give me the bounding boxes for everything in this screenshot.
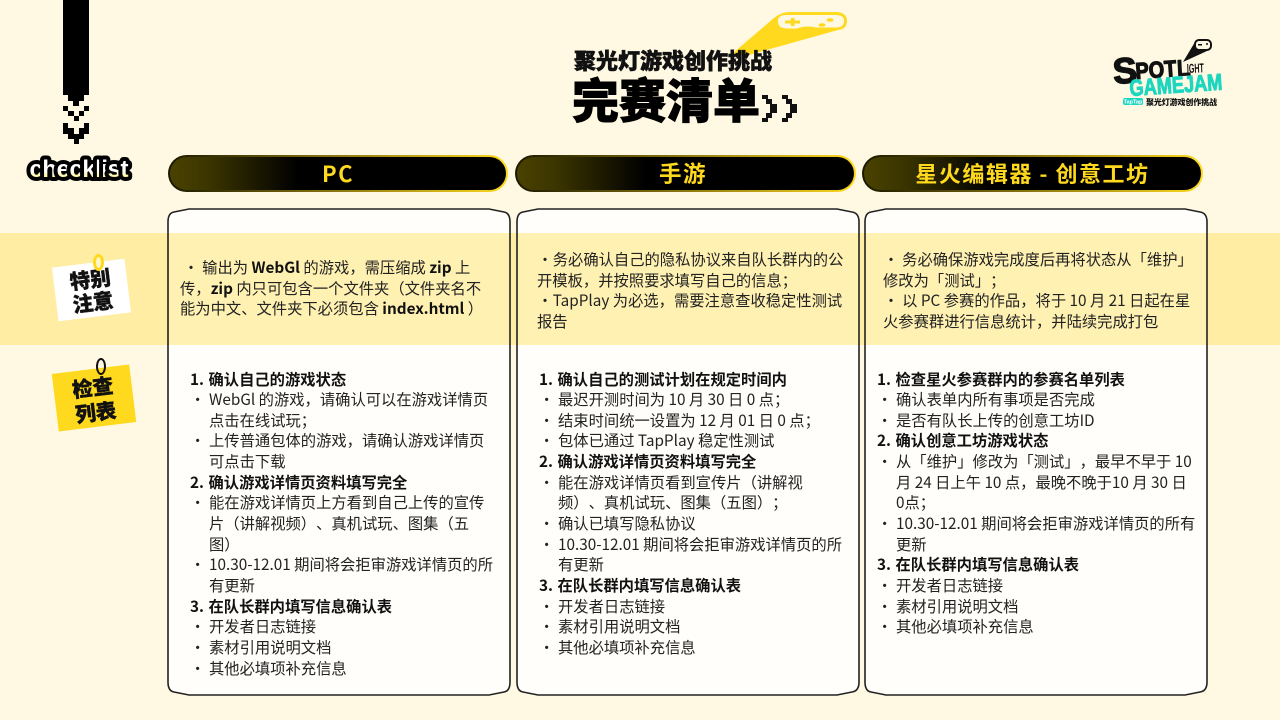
mobile special notes: 报告 — [537, 310, 568, 332]
logo TapTap badge: TapTap — [1124, 100, 1143, 106]
mobile checklist: 最迟开测时间为 10 月 30 日 0 点； — [558, 388, 789, 410]
Spark special notes: 火参赛群进行信息统计，并陆续完成打包 — [883, 310, 1158, 332]
PC checklist: 可点击下载 — [209, 450, 286, 472]
mobile checklist — [539, 368, 842, 658]
mobile special notes: ・TapPlay 为必选，需要注意查收稳定性测试 — [537, 289, 842, 311]
mobile checklist: ・ — [539, 636, 554, 658]
logo wordmark — [1111, 49, 1223, 101]
PC checklist: 有更新 — [209, 574, 255, 596]
mobile checklist: 2. 确认游戏详情页资料填写完全 — [539, 450, 756, 472]
PC special notes: 传，zip 内只可包含一个文件夹（文件夹名不 — [180, 277, 481, 299]
PC special notes: ・ 输出为 WebGl 的游戏，需压缩成 zip 上 — [183, 256, 470, 278]
mobile checklist: 3. 在队长群内填写信息确认表 — [539, 574, 741, 596]
logo spotlight cone and controller — [1183, 40, 1211, 62]
sticky note: special notes — [52, 259, 131, 321]
mobile checklist: 结束时间统一设置为 12 月 01 日 0 点； — [558, 409, 820, 431]
mobile checklist: ・ — [539, 471, 554, 493]
PC checklist: ・ — [190, 657, 205, 679]
mobile checklist: ・ — [539, 595, 554, 617]
Spark checklist: ・ — [877, 450, 892, 472]
logo wordmark: L — [1176, 54, 1191, 81]
Spark checklist: 更新 — [896, 533, 927, 555]
mobile checklist: 1. 确认自己的测试计划在规定时间内 — [539, 368, 787, 390]
icon: pixel drop pointer — [63, 0, 89, 144]
logo wordmark: IGHT — [1187, 60, 1204, 76]
icon: yellow paper clip — [93, 254, 104, 271]
mobile special notes — [537, 248, 843, 332]
PC checklist: ・ — [190, 429, 205, 451]
Spark special notes — [883, 248, 1193, 332]
Spark checklist: 是否有队长上传的创意工坊ID — [896, 409, 1095, 431]
PC checklist: ・ — [190, 615, 205, 637]
header pill: PC — [168, 155, 508, 192]
checklist label: checklist — [30, 156, 128, 183]
PC checklist: 能在游戏详情页上方看到自己上传的宣传 — [209, 491, 484, 513]
mobile checklist: 素材引用说明文档 — [558, 615, 680, 637]
PC special notes — [180, 256, 483, 319]
PC checklist: ・ — [190, 553, 205, 575]
icon: black paper clip — [96, 358, 106, 375]
sticky note: checklist — [52, 364, 136, 432]
logo wordmark: POT — [1135, 55, 1177, 84]
PC checklist: 其他必填项补充信息 — [209, 657, 347, 679]
PC special notes: 能为中文、文件夹下必须包含 index.html ） — [180, 297, 483, 319]
subtitle: 聚光灯游戏创作挑战 — [574, 44, 772, 76]
Spark checklist: ・ — [877, 574, 892, 596]
logo wordmark: S — [1111, 49, 1139, 92]
mobile checklist: 确认已填写隐私协议 — [558, 512, 696, 534]
header pill: Spark editor — [862, 155, 1203, 192]
Spark checklist: ・ — [877, 615, 892, 637]
PC checklist: 图） — [209, 533, 240, 555]
Spark checklist: ・ — [877, 388, 892, 410]
PC checklist: 开发者日志链接 — [209, 615, 316, 637]
header pill: mobile games — [515, 155, 856, 192]
mobile checklist: ・ — [539, 388, 554, 410]
header pill: PC: PC — [322, 157, 354, 189]
Spark special notes: 修改为「测试」； — [883, 269, 1005, 291]
main title: 完赛清单 — [572, 63, 760, 132]
background band: special notes row — [0, 233, 1280, 345]
PC checklist: 1. 确认自己的游戏状态 — [190, 368, 346, 390]
panel: PC — [167, 208, 511, 696]
Spark checklist: 1. 检查星火参赛群内的参赛名单列表 — [877, 368, 1125, 390]
mobile special notes: 开模板，并按照要求填写自己的信息； — [537, 269, 797, 291]
PC checklist: ・ — [190, 388, 205, 410]
PC checklist: 3. 在队长群内填写信息确认表 — [190, 595, 392, 617]
title block — [572, 44, 797, 132]
mobile checklist: 有更新 — [558, 553, 604, 575]
Spark checklist: 从「维护」修改为「测试」，最早不早于 10 — [896, 450, 1192, 472]
sticky note: checklist: 列表 — [73, 394, 118, 428]
mobile checklist: ・ — [539, 533, 554, 555]
mobile checklist: ・ — [539, 512, 554, 534]
PC checklist: 点击在线试玩； — [209, 409, 316, 431]
Spark checklist: 月 24 日上午 10 点，最晚不晚于10 月 30 日 — [896, 471, 1187, 493]
Spark checklist: 确认表单内所有事项是否完成 — [896, 388, 1095, 410]
Spark checklist: 0点； — [896, 491, 935, 513]
sticky note: checklist: 检查 — [70, 369, 115, 403]
PC checklist: 片（讲解视频）、真机试玩、图集（五 — [209, 512, 469, 534]
Spark checklist: ・ — [877, 512, 892, 534]
panel: mobile games — [516, 208, 860, 696]
mobile checklist: ・ — [539, 409, 554, 431]
icon: pixel double arrows — [762, 95, 797, 122]
header pill: Spark editor: 星火编辑器 - 创意工坊 — [915, 157, 1150, 189]
Spark checklist: 开发者日志链接 — [896, 574, 1003, 596]
Spark checklist: 其他必填项补充信息 — [896, 615, 1034, 637]
Spark checklist: 3. 在队长群内填写信息确认表 — [877, 553, 1079, 575]
logo: Spotlight GameJam — [1111, 39, 1223, 108]
mobile checklist: ・ — [539, 429, 554, 451]
PC checklist: ・ — [190, 491, 205, 513]
sticky note: special notes: 特别 — [68, 261, 112, 295]
PC checklist: 上传普通包体的游戏，请确认游戏详情页 — [209, 429, 484, 451]
Spark special notes: ・ 务必确保游戏完成度后再将状态从「维护」 — [883, 248, 1193, 270]
mobile checklist: 10.30-12.01 期间将会拒审游戏详情页的所 — [558, 533, 842, 555]
mobile checklist: 频）、真机试玩、图集（五图）； — [558, 491, 787, 513]
PC checklist: 2. 确认游戏详情页资料填写完全 — [190, 471, 407, 493]
PC checklist — [190, 368, 493, 679]
PC checklist: WebGl 的游戏，请确认可以在游戏详情页 — [209, 388, 488, 410]
Spark checklist: 2. 确认创意工坊游戏状态 — [877, 429, 1048, 451]
Spark checklist — [877, 368, 1195, 637]
spotlight and game controller icon — [734, 12, 847, 56]
PC checklist: 素材引用说明文档 — [209, 636, 331, 658]
header pill: mobile games: 手游 — [659, 157, 707, 189]
panel: Spark editor — [864, 208, 1208, 696]
mobile checklist: 开发者日志链接 — [558, 595, 665, 617]
mobile special notes: ・务必确认自己的隐私协议来自队长群内的公 — [537, 248, 843, 270]
Spark special notes: ・ 以 PC 参赛的作品，将于 10 月 21 日起在星 — [883, 289, 1190, 311]
Spark checklist: 10.30-12.01 期间将会拒审游戏详情页的所有 — [896, 512, 1195, 534]
Spark checklist: 素材引用说明文档 — [896, 595, 1018, 617]
PC checklist: ・ — [190, 636, 205, 658]
mobile checklist: 其他必填项补充信息 — [558, 636, 696, 658]
logo TapTap badge: 聚光灯游戏创作挑战 — [1146, 97, 1217, 108]
Spark checklist: ・ — [877, 409, 892, 431]
mobile checklist: ・ — [539, 615, 554, 637]
PC checklist: 10.30-12.01 期间将会拒审游戏详情页的所 — [209, 553, 493, 575]
mobile checklist: 能在游戏详情页看到宣传片（讲解视 — [558, 471, 803, 493]
sticky note: special notes: 注意 — [71, 284, 115, 318]
mobile checklist: 包体已通过 TapPlay 稳定性测试 — [558, 429, 774, 451]
Spark checklist: ・ — [877, 595, 892, 617]
